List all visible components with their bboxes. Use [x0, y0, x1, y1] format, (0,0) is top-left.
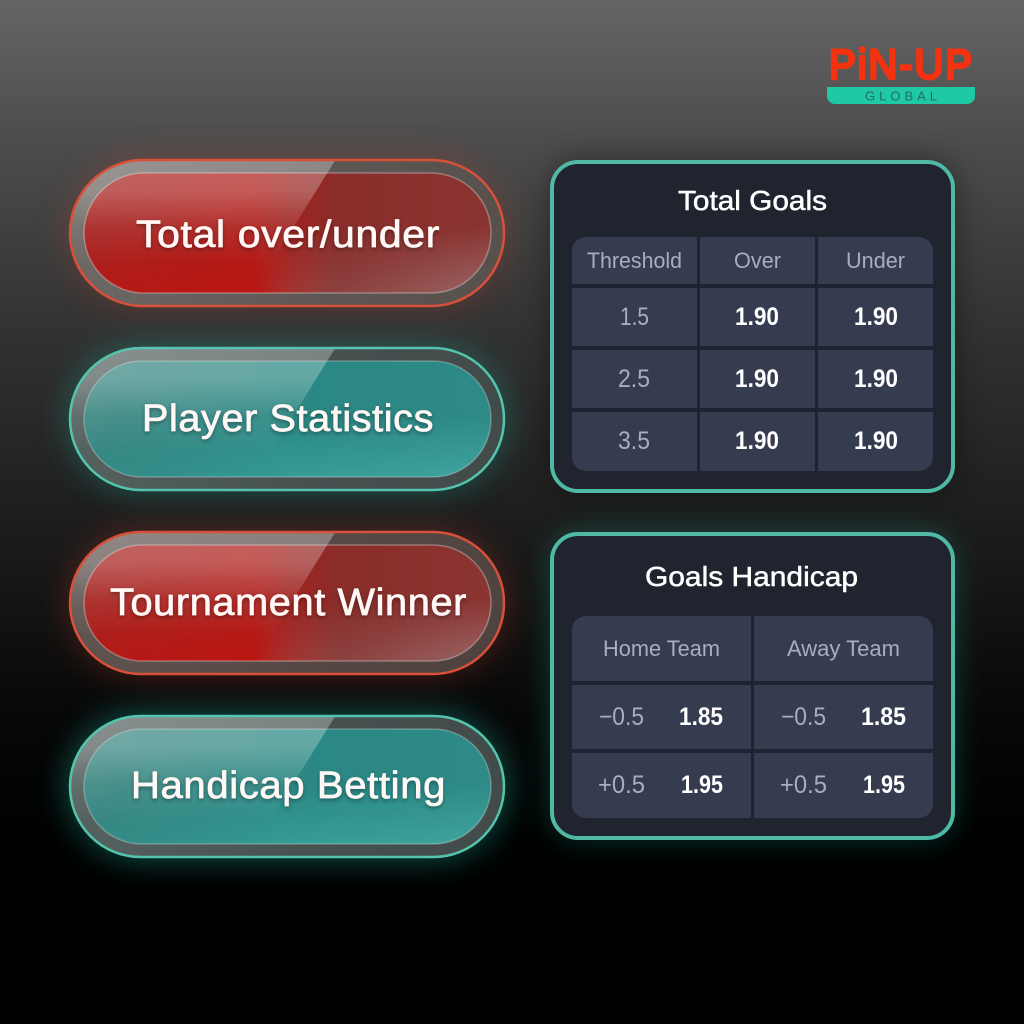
table: goals handicap odds: +0.5	[780, 771, 827, 799]
table: total goals odds: 2.5	[618, 365, 650, 393]
table: goals handicap odds: 1.95	[681, 771, 723, 799]
button: Total over/under	[60, 159, 505, 307]
table: goals handicap odds: 1.85	[861, 703, 906, 731]
table: goals handicap odds: −0.5	[599, 703, 644, 731]
table: total goals odds: 1.90	[854, 303, 898, 331]
logo: Pin-Up Global: PiN-UP	[829, 40, 974, 88]
panel: Goals Handicap	[550, 532, 955, 840]
button: Tournament Winner	[60, 531, 505, 675]
table: goals handicap odds: Home Team	[603, 636, 720, 661]
table: goals handicap odds: +0.5	[598, 771, 645, 799]
table: total goals odds	[572, 237, 933, 471]
heading: Total Goals: Total Goals	[678, 185, 827, 216]
table: total goals odds: Over	[734, 248, 781, 273]
button: Handicap Betting	[60, 715, 505, 858]
button: Player Statistics	[60, 347, 505, 491]
table: total goals odds: 1.90	[735, 427, 779, 455]
table: total goals odds: 1.90	[854, 427, 898, 455]
logo: Pin-Up Global: GLOBAL	[865, 88, 937, 104]
table: total goals odds: 1.90	[854, 365, 898, 393]
panel: Total Goals	[550, 160, 955, 492]
button: Player Statistics: Player Statistics	[142, 398, 434, 440]
table: total goals odds: Threshold	[587, 248, 682, 273]
heading: Goals Handicap: Goals Handicap	[645, 561, 858, 592]
table: goals handicap odds: −0.5	[781, 703, 826, 731]
table: goals handicap odds: 1.85	[679, 703, 723, 731]
button: Tournament Winner: Tournament Winner	[110, 582, 467, 624]
table: total goals odds: 3.5	[618, 427, 650, 455]
table: total goals odds: 1.90	[735, 365, 779, 393]
table: total goals odds: 1.90	[735, 303, 779, 331]
table: total goals odds: Under	[846, 248, 905, 273]
table: goals handicap odds: 1.95	[863, 771, 905, 799]
table: goals handicap odds: Away Team	[787, 636, 900, 661]
button: Total over/under: Total over/under	[136, 214, 440, 256]
table: total goals odds: 1.5	[620, 303, 649, 331]
table: goals handicap odds	[572, 616, 933, 818]
button: Handicap Betting: Handicap Betting	[131, 765, 446, 807]
